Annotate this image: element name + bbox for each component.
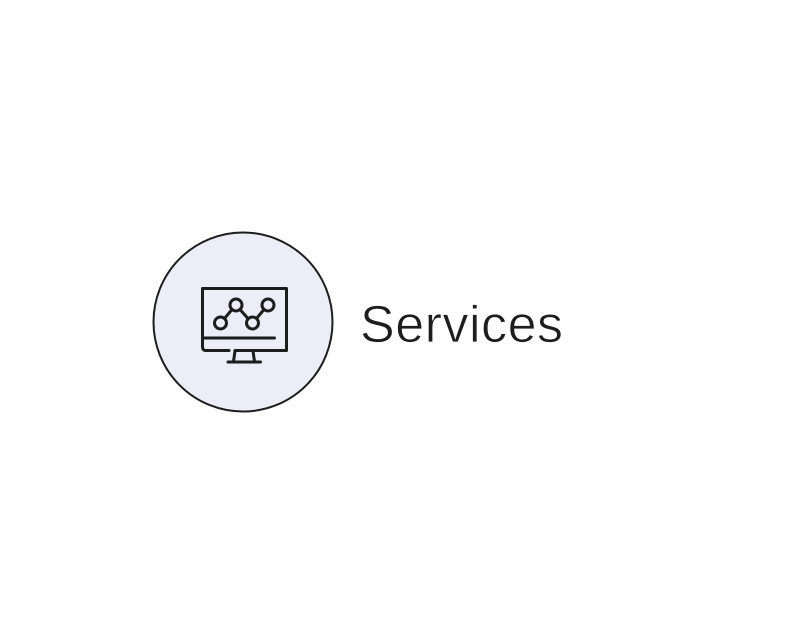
badge circle <box>154 232 332 412</box>
heading: Services: Services <box>360 296 563 354</box>
monitor frame <box>202 288 286 350</box>
icon badge: services monitor <box>154 232 332 412</box>
chart data points <box>214 317 226 329</box>
monitor lower bezel line <box>203 336 274 340</box>
chart connecting lines <box>224 310 264 318</box>
icon: monitor with line chart <box>202 288 286 362</box>
monitor stand <box>228 351 260 362</box>
